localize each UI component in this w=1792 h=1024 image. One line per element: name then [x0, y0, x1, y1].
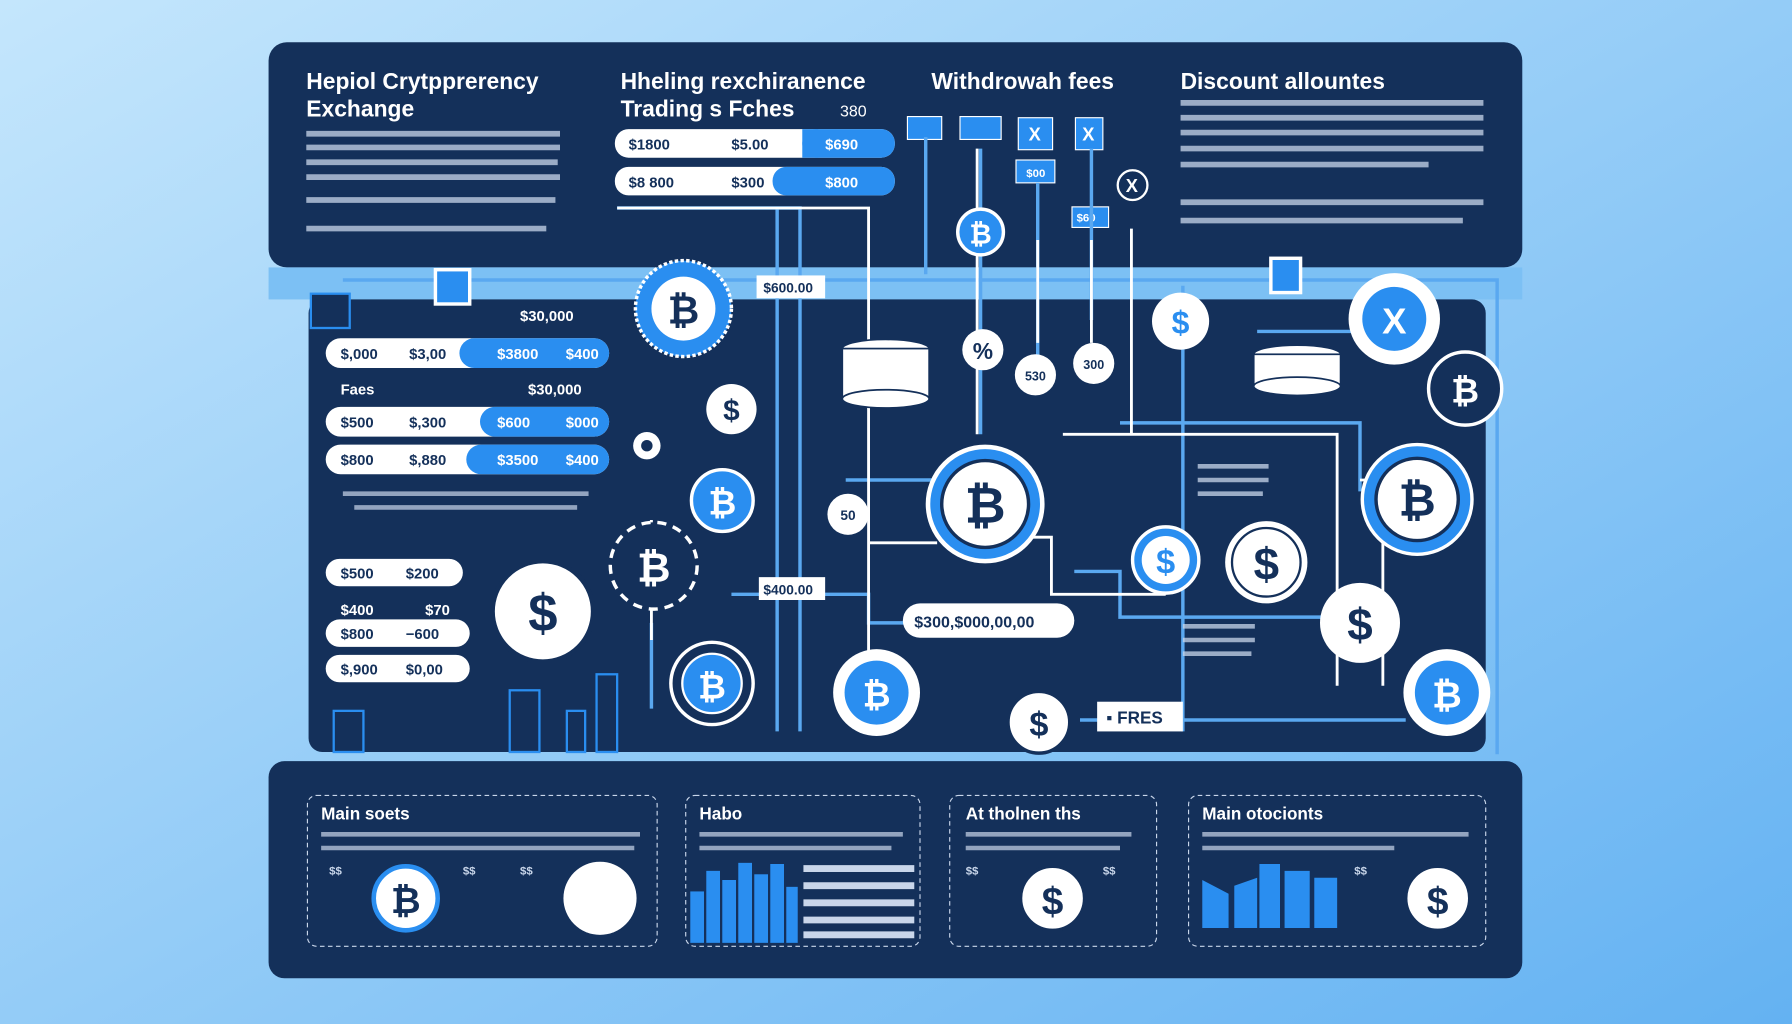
fee bars: left: −600: [406, 627, 439, 643]
withdrawal boxes: $60: [1077, 213, 1096, 225]
card: habo chart: [686, 795, 920, 946]
card: main discounts: $: [1427, 880, 1449, 923]
fee bars: left: $000: [566, 415, 599, 431]
coins: dollar: $: [1156, 544, 1175, 582]
card: at a glance: $$: [1103, 865, 1116, 877]
title: trading fees: Hheling rexchiranence: [621, 68, 866, 94]
title: trading fees: Trading s Fches: [621, 96, 794, 122]
fee bars: trading: $5.00: [731, 138, 769, 154]
title: exchange: Exchange: [306, 96, 414, 122]
coins: dollar: $: [1254, 538, 1279, 589]
fee bars: left: $,880: [409, 453, 446, 469]
coins: dollar: 50: [840, 508, 856, 523]
text block: flow notes: [1183, 466, 1269, 654]
coins: bitcoin: X: [1382, 301, 1407, 342]
panel: bottom summary: [269, 761, 1522, 978]
fee bars: trading: $8 800: [629, 175, 674, 191]
panel: main flow: [269, 137, 1522, 754]
coins: dollar: $: [1347, 599, 1373, 650]
fee bars: left: $,000: [341, 347, 378, 363]
card: main assets: $$: [520, 865, 533, 877]
text block: exchange description: [306, 134, 560, 229]
fee bars: left: $30,000: [520, 309, 574, 325]
withdrawal boxes: X: [1126, 175, 1139, 196]
coins: bitcoin: ₿: [1451, 372, 1479, 410]
withdrawal boxes: X: [1082, 124, 1095, 145]
coins: bitcoin: ₿: [965, 476, 1006, 533]
fee bars: left: $3500: [497, 453, 538, 469]
title: withdrawal fees: Withdrowah fees: [931, 68, 1114, 94]
card: main discounts: Main otocionts: [1202, 803, 1323, 823]
text block: discount description: [1181, 103, 1483, 221]
withdrawal boxes: X: [1029, 124, 1042, 145]
value labels: $400.00: [763, 582, 813, 597]
fee bars: trading: $800: [825, 175, 858, 191]
title: exchange: [306, 68, 539, 122]
withdrawal boxes: $00: [1026, 168, 1045, 180]
coins: bitcoin: ₿: [668, 289, 699, 332]
fee bars: left: $70: [425, 603, 450, 619]
coins: dollar: $: [1172, 305, 1190, 341]
fee bars: left: Faes: [341, 382, 374, 398]
coin stacks: [842, 339, 1341, 408]
fee bars: left: $800: [341, 627, 374, 643]
card: main discounts: [1189, 795, 1486, 946]
fee bars: left: $3800: [497, 347, 538, 363]
card: habo chart: Habo: [699, 803, 742, 823]
value labels: [757, 275, 1183, 731]
coins: dollar: 530: [1025, 370, 1046, 384]
coins: bitcoin: ₿: [1432, 674, 1462, 715]
fee bars: left: $200: [406, 566, 439, 582]
fee bars: left: $30,000: [528, 382, 582, 398]
fee bars: trading: [615, 129, 895, 195]
title: trading fees: 380: [840, 104, 867, 121]
fee bars: left: $0,00: [406, 662, 443, 678]
fee bars: left: $400: [341, 603, 374, 619]
card: main assets: Main soets: [321, 803, 410, 823]
title: trading fees: [621, 68, 867, 122]
card: main assets: $$: [463, 865, 476, 877]
fee bars: left: $,900: [341, 662, 378, 678]
coins: bitcoin: [610, 209, 1502, 736]
coins: dollar: $: [528, 584, 557, 643]
fee bars: left: $600: [497, 415, 530, 431]
coins: bitcoin: ₿: [698, 668, 726, 706]
coins: dollar: $: [1029, 706, 1048, 744]
fee bars: left: $,300: [409, 415, 446, 431]
fee bars: left: $500: [341, 566, 374, 582]
fee bars: left: $400: [566, 347, 599, 363]
card: at a glance: $$: [966, 865, 979, 877]
coins: dollar: 300: [1083, 358, 1104, 372]
card: at a glance: $: [1042, 880, 1064, 923]
coins: bitcoin: ₿: [969, 218, 992, 249]
coins: bitcoin: ₿: [863, 676, 891, 714]
card: main assets: [307, 795, 657, 946]
title: exchange: Hepiol Crytpprerency: [306, 68, 539, 94]
flow lines: [343, 137, 1497, 754]
fee bars: left: $400: [566, 453, 599, 469]
fee bars: left: $3,00: [409, 347, 446, 363]
card: at a glance: At tholnen ths: [966, 803, 1081, 823]
panel: top header: [269, 42, 1522, 267]
coins: dollar: $: [723, 395, 740, 428]
coins: bitcoin: ₿: [708, 484, 736, 522]
fee bars: trading: $300: [731, 175, 764, 191]
fee bars: left: $800: [341, 453, 374, 469]
withdrawal boxes: [907, 117, 1147, 227]
title: discount: Discount allountes: [1181, 68, 1385, 94]
fee bars: trading: $1800: [629, 138, 670, 154]
fee bars: trading: $690: [825, 138, 858, 154]
value labels: ▪ FRES: [1106, 707, 1163, 727]
value labels: $600.00: [763, 281, 813, 296]
city buildings: [311, 294, 617, 752]
card: main assets: ₿: [391, 880, 421, 921]
card: at a glance: [950, 795, 1157, 946]
card: main discounts: $$: [1354, 865, 1368, 877]
coins: dollar: %: [973, 338, 993, 364]
coins: bitcoin: ₿: [1399, 474, 1436, 525]
coins: dollar: [493, 293, 1400, 753]
value labels: $300,$000,00,00: [914, 614, 1035, 631]
card: main assets: $$: [329, 865, 342, 877]
fee bars: left: [326, 309, 609, 682]
coins: bitcoin: ₿: [637, 545, 670, 591]
fee bars: left: $500: [341, 415, 374, 431]
